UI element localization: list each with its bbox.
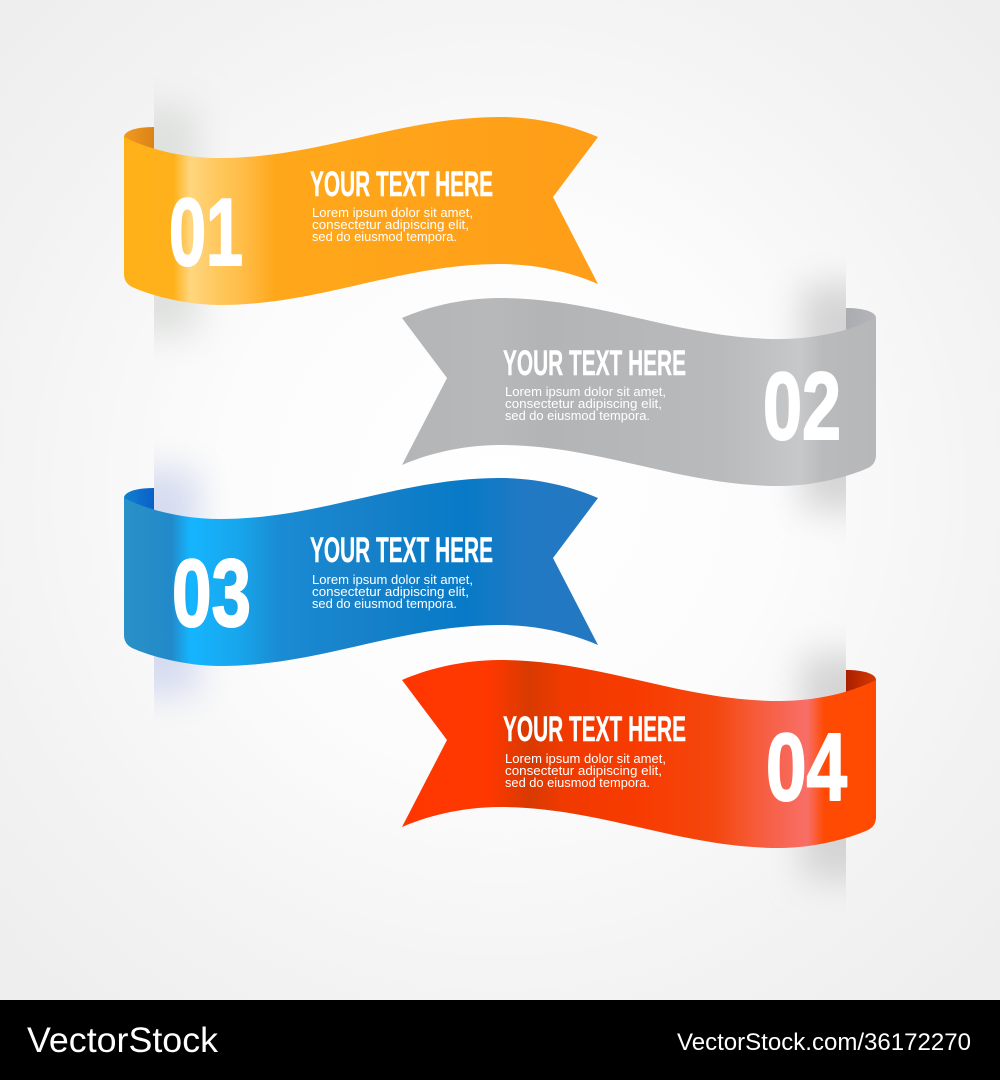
ribbon 03 fold xyxy=(124,488,154,526)
shadows: paper slits behind the ribbons xyxy=(118,105,882,880)
ribbon 03 body text: Lorem ipsum dolor sit amet, xyxy=(312,573,473,587)
ribbon 01 body text xyxy=(312,206,473,244)
ribbon 01 heading: YOUR TEXT HERE xyxy=(310,165,493,204)
ribbon 03 band xyxy=(124,478,598,666)
ribbon 02 heading: YOUR TEXT HERE xyxy=(503,344,686,383)
ribbon 02 body text: sed do eiusmod tempora. xyxy=(505,409,650,423)
ribbon 03 number: 03 xyxy=(172,540,251,647)
ribbon 02 band xyxy=(402,298,876,486)
ribbon 02 body text: Lorem ipsum dolor sit amet, xyxy=(505,385,666,399)
ribbon 01 body text: Lorem ipsum dolor sit amet, xyxy=(312,206,473,220)
panel: ribbon 03 blue xyxy=(124,478,598,666)
ribbon 03 heading: YOUR TEXT HERE xyxy=(310,531,493,570)
ribbon 04 body text: Lorem ipsum dolor sit amet, xyxy=(505,752,666,766)
ribbon 01 body text: consectetur adipiscing elit, xyxy=(312,218,469,232)
ribbon 01 body text: sed do eiusmod tempora. xyxy=(312,230,457,244)
panel: ribbon 01 orange xyxy=(124,117,598,305)
ribbon 04 body text: consectetur adipiscing elit, xyxy=(505,764,662,778)
ribbon 04 body text xyxy=(505,752,666,790)
ribbon 01 fold xyxy=(124,127,154,165)
ribbon 02 number: 02 xyxy=(763,353,841,460)
ribbon 02 body text xyxy=(505,385,666,423)
ribbon 03 body text: consectetur adipiscing elit, xyxy=(312,585,469,599)
ribbon 02 fold xyxy=(846,308,876,346)
ribbon 04 band xyxy=(402,660,876,848)
footer image id: VectorStock.com/36172270 xyxy=(677,1029,971,1056)
ribbon 04 number: 04 xyxy=(766,714,847,821)
ribbon 01 band xyxy=(124,117,598,305)
panel: ribbon 02 gray xyxy=(402,298,876,486)
ribbon 01 number: 01 xyxy=(169,179,243,286)
ribbon 04 fold xyxy=(846,670,876,708)
ribbon 03 body text: sed do eiusmod tempora. xyxy=(312,597,457,611)
footer bar xyxy=(0,1000,1000,1080)
ribbon 03 body text xyxy=(312,573,473,611)
ribbon 02 body text: consectetur adipiscing elit, xyxy=(505,397,662,411)
footer brand: VectorStock xyxy=(27,1021,219,1060)
panel: ribbon 04 red xyxy=(402,660,876,848)
ribbon 04 body text: sed do eiusmod tempora. xyxy=(505,776,650,790)
ribbon 04 heading: YOUR TEXT HERE xyxy=(503,710,686,749)
